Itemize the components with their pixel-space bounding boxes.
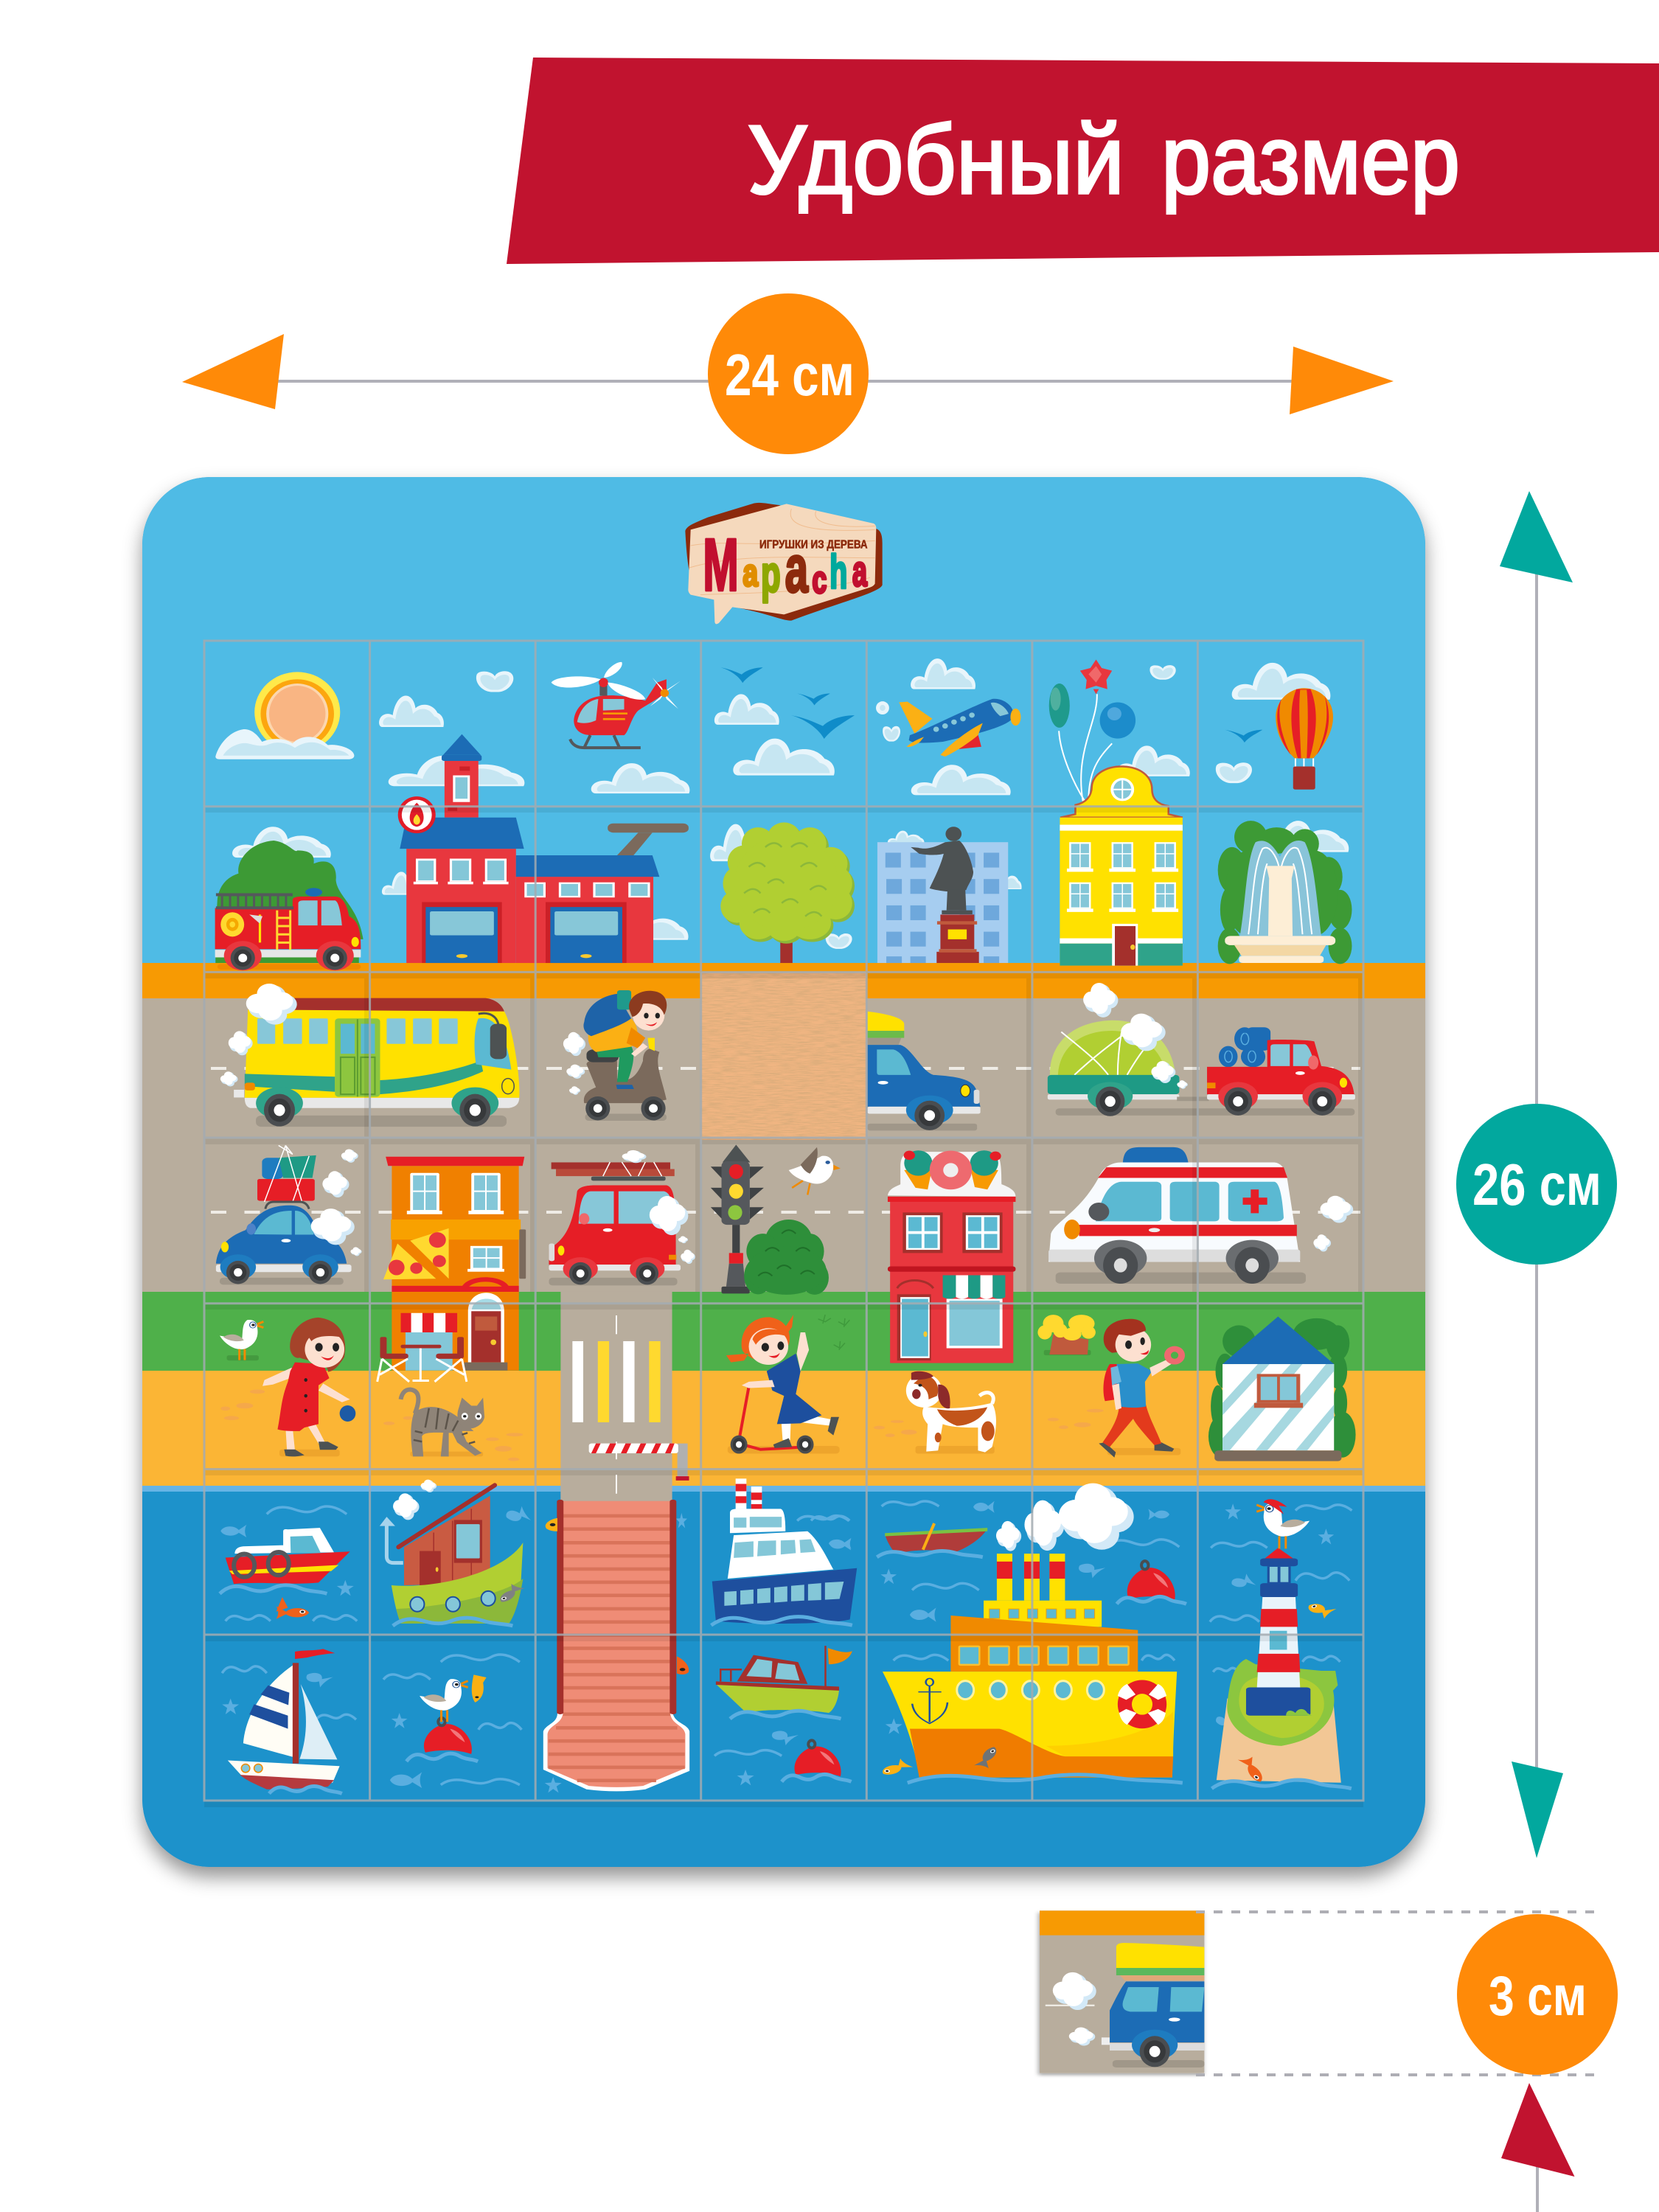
icon: blue car with luggage — [216, 1145, 362, 1284]
icon: traffic light — [711, 1145, 764, 1293]
icon: red tugboat — [220, 1528, 350, 1619]
icon: striped house — [1208, 1316, 1356, 1461]
icon: big yellow ship — [877, 1484, 1183, 1783]
icon: hot air balloon — [1225, 688, 1333, 790]
clouds — [232, 671, 852, 949]
height dimension: 26 cm — [1456, 491, 1617, 1858]
tile size dimension: 3 cm: 3 см — [1489, 1965, 1587, 2028]
icon: helicopter — [552, 662, 681, 748]
width dimension: 24 cm — [182, 293, 1394, 454]
clouds — [876, 658, 1349, 889]
sea decoration — [811, 1501, 1352, 1734]
icon: ambulance — [1048, 1147, 1353, 1284]
heading: размер — [1161, 105, 1460, 214]
logo: a — [852, 547, 867, 595]
icon: girl on kick scooter — [726, 1315, 840, 1454]
logo: p — [761, 546, 781, 603]
puzzle board background — [142, 477, 1425, 1867]
icon: houseboat — [380, 1480, 525, 1626]
logo: a — [785, 533, 809, 607]
icon: bus — [220, 984, 519, 1127]
icon: sailboat — [228, 1649, 342, 1793]
sea decoration — [220, 1506, 852, 1792]
sky tiles, right side — [876, 658, 1352, 966]
icon: statue and building — [877, 827, 1008, 963]
tile size dimension: 3 cm — [1457, 1914, 1618, 2212]
heading: Удобный — [748, 105, 1124, 214]
icon: barrier — [589, 1444, 689, 1481]
water tiles, right side — [811, 1484, 1352, 1789]
wooden missing tile — [700, 972, 866, 1140]
water tiles, left side — [220, 1475, 857, 1793]
birds — [720, 667, 855, 739]
icon: buoy — [1117, 1561, 1186, 1604]
icon: boy with donut — [1048, 1319, 1185, 1458]
logo: M — [703, 524, 739, 606]
icon: standing gull — [220, 1320, 263, 1360]
icon: balloons — [1049, 659, 1135, 801]
icon: gull on buoy — [406, 1674, 487, 1761]
puzzle grid lines — [204, 641, 1363, 1804]
icon: pizzeria building — [378, 1157, 526, 1382]
icon: dog — [874, 1371, 996, 1454]
icon: girl with ball — [220, 1318, 355, 1456]
logo: h — [830, 546, 847, 599]
icon: sweet shop — [888, 1150, 1015, 1363]
sky tiles, left side — [215, 662, 855, 970]
logo: a — [742, 551, 759, 594]
icon: tree — [720, 822, 855, 963]
icon: rowboat — [877, 1523, 987, 1557]
icon: green motor boat — [716, 1646, 852, 1781]
logo: c — [812, 558, 827, 601]
dashed size guides — [1196, 1912, 1597, 2075]
icon: grass sprigs — [818, 1315, 849, 1350]
width dimension: 24 cm: 24 см — [725, 342, 855, 408]
icon: trailer and pickup truck — [1048, 983, 1355, 1116]
icon: pier — [543, 1475, 689, 1791]
icon: yellow townhouse — [1060, 767, 1183, 966]
road and park tiles, left side — [216, 984, 841, 1512]
icon: fountain — [1218, 821, 1352, 964]
road and park tiles, right side — [818, 983, 1356, 1461]
icon: crosswalk road — [560, 1292, 672, 1512]
icon: fire station — [398, 734, 689, 963]
icon: red car — [549, 1150, 695, 1285]
icon: airplane — [899, 699, 1020, 757]
icon: boy on scooter — [563, 990, 667, 1121]
icon: flying gull — [789, 1147, 841, 1194]
icon: cat — [383, 1389, 523, 1461]
icon: blue car right half — [868, 1012, 981, 1130]
icon: fire truck with bush — [215, 841, 364, 970]
icon: sun with cloud — [215, 672, 354, 759]
logo — [685, 503, 883, 624]
icon: ferry — [711, 1478, 857, 1625]
logo: ИГРУШКИ ИЗ ДЕРЕВА — [759, 538, 868, 551]
heading — [748, 105, 1460, 214]
icon: bush — [744, 1220, 829, 1295]
single puzzle tile sample — [1040, 1910, 1204, 2073]
icon: flower box — [1037, 1315, 1096, 1355]
header banner — [507, 58, 1659, 264]
height dimension: 26 cm: 26 см — [1472, 1152, 1601, 1217]
icon: lighthouse island — [1211, 1499, 1352, 1789]
